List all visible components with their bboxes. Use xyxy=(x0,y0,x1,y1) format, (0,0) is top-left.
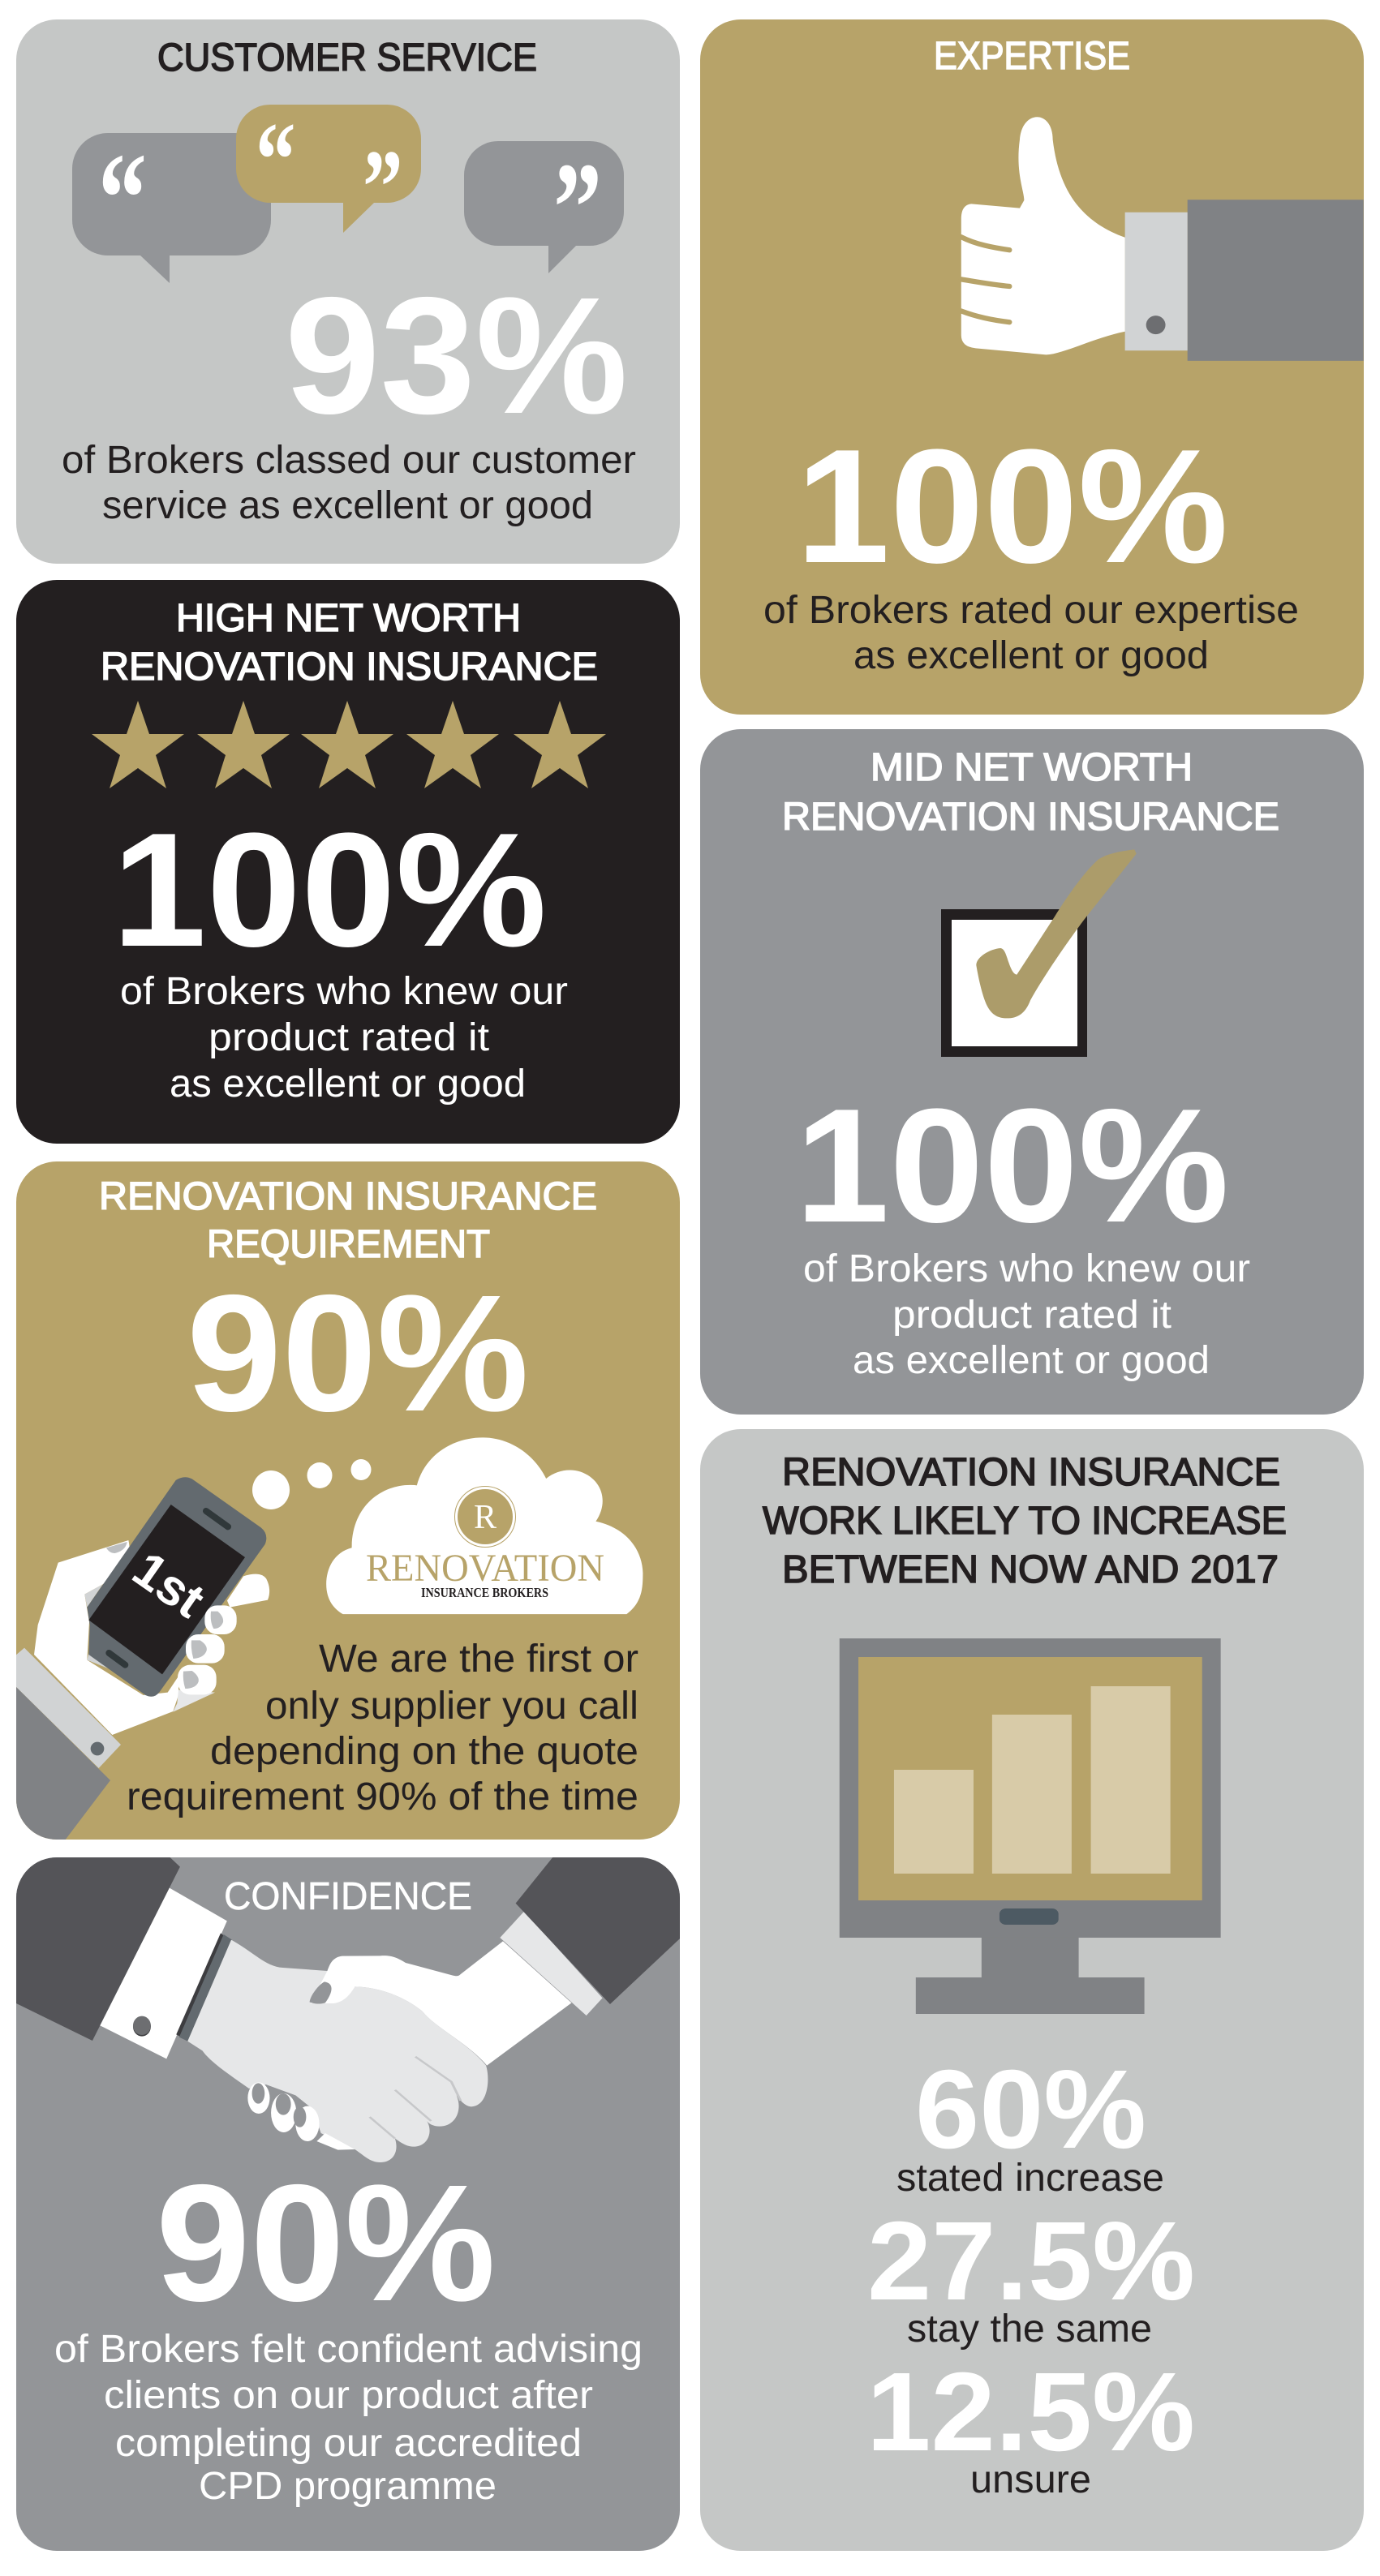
heading: work likely to increase xyxy=(763,1451,1287,1591)
text: requirement description: requirement 90% of the time xyxy=(127,1775,638,1818)
icon: gold speech bubble: “ xyxy=(256,101,295,219)
text: confidence description: completing our accredited xyxy=(115,2422,582,2465)
label: stay the same: stay the same xyxy=(907,2308,1152,2351)
logo: renovation cloud: RENOVATION xyxy=(366,1547,604,1590)
panel: renovation insurance requirement xyxy=(15,1161,680,1844)
heading: mid net worth xyxy=(782,746,1279,839)
heading: customer service: CUSTOMER SERVICE xyxy=(157,36,537,79)
panel: customer service xyxy=(16,19,680,564)
panel: mid net worth renovation insurance xyxy=(700,729,1364,1415)
chart: monitor with bar chart xyxy=(840,1638,1221,2014)
text: customer service description: of Brokers classed our customer xyxy=(62,439,636,482)
heading: mid net worth: MID NET WORTH xyxy=(871,746,1193,789)
text: requirement description xyxy=(127,1638,638,1818)
text: expertise description xyxy=(763,589,1299,677)
icon: left speech bubble: “ xyxy=(98,126,147,270)
text: mid net worth description: product rated it xyxy=(892,1294,1171,1337)
heading: renovation insurance requirement: RENOVATION INSURANCE xyxy=(99,1175,597,1218)
text: customer service description xyxy=(62,439,636,527)
text: requirement description: depending on the quote xyxy=(210,1730,638,1773)
text: high net worth description: product rated it xyxy=(209,1016,489,1059)
icon: five stars xyxy=(92,701,606,788)
panel: high net worth renovation insurance xyxy=(16,580,680,1144)
text: confidence description: of Brokers felt confident advising xyxy=(54,2328,643,2371)
phone label: 1st: 1st xyxy=(123,1541,214,1629)
text: confidence description xyxy=(54,2328,643,2508)
heading: renovation insurance requirement: REQUIREMENT xyxy=(207,1223,490,1266)
text: mid net worth description: as excellent or good xyxy=(853,1339,1210,1382)
heading: expertise: EXPERTISE xyxy=(934,35,1130,78)
heading: renovation insurance requirement xyxy=(99,1175,597,1266)
icon: left speech bubble xyxy=(72,126,271,283)
text: requirement description: only supplier you call xyxy=(265,1685,638,1728)
icon: right speech bubble xyxy=(464,135,624,280)
text: high net worth description: as excellent or good xyxy=(170,1063,526,1106)
stat: 100%: 100% xyxy=(796,416,1228,597)
text: mid net worth description xyxy=(803,1247,1250,1382)
text: expertise description: as excellent or good xyxy=(853,634,1209,677)
heading: mid net worth: RENOVATION INSURANCE xyxy=(782,796,1279,839)
stat: 60%: 60% xyxy=(915,2047,1146,2172)
stat: 27.5%: 27.5% xyxy=(867,2199,1195,2324)
logo: renovation cloud xyxy=(326,1437,643,1614)
icon: right speech bubble: ” xyxy=(553,135,602,280)
panel: confidence xyxy=(14,1856,683,2551)
text: mid net worth description: of Brokers who knew our xyxy=(803,1247,1250,1290)
text: requirement description: We are the first or xyxy=(319,1638,638,1681)
heading: confidence: CONFIDENCE xyxy=(224,1875,472,1918)
icon: hand holding phone xyxy=(15,1477,269,1844)
stat: 12.5%: 12.5% xyxy=(866,2350,1195,2475)
heading: high net worth: RENOVATION INSURANCE xyxy=(101,646,598,689)
logo: renovation cloud: R xyxy=(474,1499,497,1536)
heading: work likely to increase: BETWEEN NOW AND 2017 xyxy=(782,1548,1279,1591)
text: expertise description: of Brokers rated our expertise xyxy=(763,589,1299,632)
icon: gold speech bubble xyxy=(236,101,421,247)
label: unsure: unsure xyxy=(970,2458,1091,2501)
icon: checkbox with tick xyxy=(941,849,1137,1057)
stat: 100%: 100% xyxy=(112,800,547,981)
panel: expertise xyxy=(700,19,1364,715)
icon: thumbs up xyxy=(961,117,1364,361)
stat: 93%: 93% xyxy=(285,263,628,449)
label: stated increase: stated increase xyxy=(896,2157,1164,2200)
stat: 90%: 90% xyxy=(187,1260,529,1446)
icon: thought bubble dots xyxy=(252,1459,372,1509)
logo: renovation cloud: INSURANCE BROKERS xyxy=(421,1585,548,1600)
cuff and sleeve xyxy=(15,1648,121,1844)
text: customer service description: service as excellent or good xyxy=(102,484,593,527)
icon: handshake xyxy=(14,1856,683,2162)
text: confidence description: clients on our product after xyxy=(104,2374,593,2417)
heading: high net worth: HIGH NET WORTH xyxy=(176,597,521,640)
stat: 100%: 100% xyxy=(795,1075,1229,1256)
heading: work likely to increase: WORK LIKELY TO INCREASE xyxy=(763,1500,1287,1543)
heading: high net worth xyxy=(101,597,598,689)
text: high net worth description xyxy=(120,970,568,1106)
icon: gold speech bubble: ” xyxy=(363,128,402,247)
text: high net worth description: of Brokers who knew our xyxy=(120,970,568,1013)
panel: work likely to increase xyxy=(700,1429,1364,2551)
stat: 90%: 90% xyxy=(156,2150,496,2336)
text: confidence description: CPD programme xyxy=(199,2465,497,2508)
heading: work likely to increase: RENOVATION INSURANCE xyxy=(782,1451,1280,1494)
